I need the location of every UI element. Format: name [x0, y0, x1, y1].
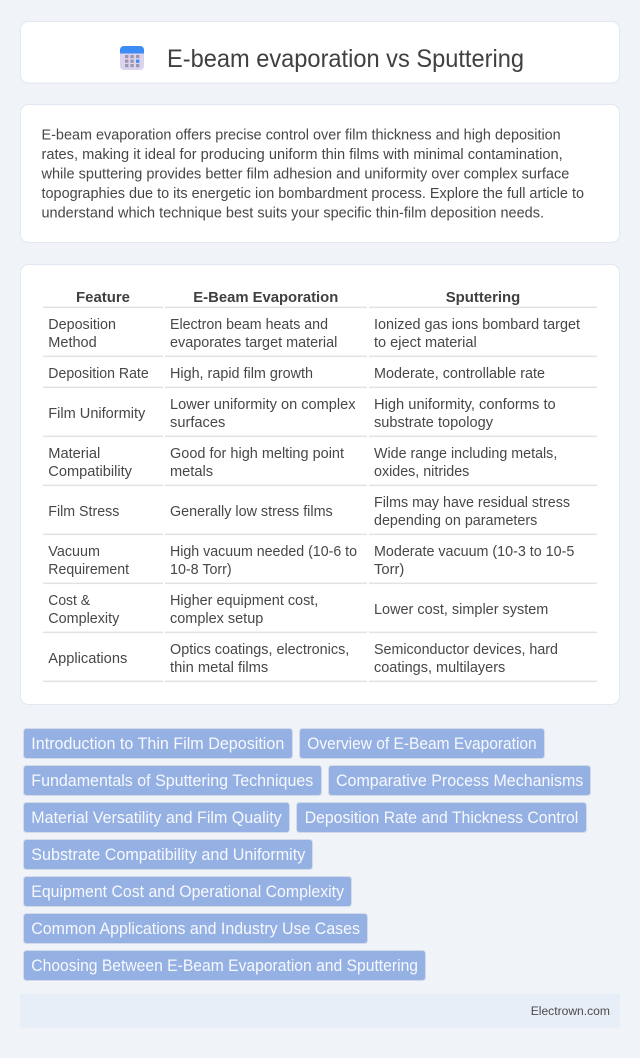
row: vacuum requirement — [48, 544, 574, 578]
tag: material versatility: Material Versatility and Film Quality — [31, 809, 283, 827]
row: material compatibility: Good for high melting point — [170, 446, 344, 462]
row: film uniformity: surfaces — [170, 415, 225, 431]
row: deposition method: to eject material — [374, 335, 477, 351]
row: film uniformity: Film Uniformity — [48, 406, 146, 422]
row: applications — [48, 642, 558, 676]
intro text block: while sputtering provides better film adhesion and uniformity over complex surface — [41, 165, 569, 182]
row: vacuum requirement: High vacuum needed (10-6 to — [170, 544, 357, 560]
row: material compatibility — [48, 446, 557, 480]
row: deposition rate: High, rapid film growth — [170, 366, 313, 382]
tag: substrate — [24, 840, 312, 870]
row: material compatibility: oxides, nitrides — [374, 464, 469, 480]
row: cost and complexity: Cost & — [48, 593, 90, 609]
row: film uniformity: substrate topology — [374, 415, 494, 431]
row: deposition method — [48, 317, 580, 351]
tag: introduction: Introduction to Thin Film Deposition — [31, 735, 284, 753]
row: applications: Applications — [48, 651, 127, 667]
row: deposition rate: Deposition Rate — [48, 366, 149, 382]
row: vacuum requirement: Requirement — [48, 562, 129, 578]
row: deposition rate: Moderate, controllable rate — [374, 366, 545, 382]
table header row — [76, 289, 520, 306]
row: deposition method: evaporates target material — [170, 335, 337, 351]
intro text block — [41, 126, 584, 221]
row: film stress: Generally low stress films — [170, 504, 333, 520]
row: deposition method: Electron beam heats and — [170, 317, 328, 333]
tag: mechanisms: Comparative Process Mechanisms — [336, 772, 583, 790]
row: cost and complexity — [48, 593, 548, 627]
footer: Electrown.com — [531, 1004, 610, 1018]
row: deposition method: Ionized gas ions bombard target — [374, 317, 580, 333]
row: cost and complexity: Lower cost, simpler system — [374, 602, 548, 618]
row: applications: thin metal films — [170, 660, 268, 676]
panel: introduction — [20, 104, 620, 242]
tag: choosing — [24, 950, 426, 980]
row: film stress: depending on parameters — [374, 513, 537, 529]
row: applications: Optics coatings, electronics, — [170, 642, 349, 658]
intro text block: E-beam evaporation offers precise control over film thickness and high deposition — [42, 126, 561, 143]
row: applications: Semiconductor devices, hard — [374, 642, 558, 658]
topic tags — [24, 728, 590, 980]
tag: deposition rate: Deposition Rate and Thickness Control — [305, 809, 578, 827]
table header row: E-Beam Evaporation — [193, 289, 338, 306]
row: film uniformity — [48, 397, 556, 431]
row: film stress — [48, 495, 570, 529]
row: deposition rate — [48, 366, 545, 382]
row: deposition method: Deposition — [48, 317, 116, 333]
row: material compatibility: metals — [170, 464, 213, 480]
row: material compatibility: Compatibility — [48, 464, 133, 480]
row: cost and complexity: Complexity — [48, 611, 120, 627]
intro text block: understand which technique best suits your specific thin-film deposition needs. — [42, 204, 544, 221]
row: cost and complexity: complex setup — [170, 611, 263, 627]
icon: calendar — [120, 46, 144, 70]
tag: introduction — [24, 728, 292, 758]
row: film uniformity: Lower uniformity on complex — [170, 397, 356, 413]
intro text block: rates, making it ideal for producing uniform thin films with minimal contamination, — [42, 146, 563, 163]
row: film stress: Film Stress — [48, 504, 119, 520]
panel: comparison table — [20, 264, 620, 704]
tag: substrate: Substrate Compatibility and Uniformity — [31, 846, 306, 864]
tag: material versatility — [24, 802, 290, 832]
row: vacuum requirement: 10-8 Torr) — [170, 562, 232, 578]
row: material compatibility: Material — [48, 446, 100, 462]
table header row: Feature — [76, 289, 130, 306]
row: cost and complexity: Higher equipment cost, — [170, 593, 318, 609]
tag: applications — [24, 914, 368, 944]
intro text block: topographies due to its energetic ion bombardment process. Explore the full article to — [42, 185, 584, 202]
tag: mechanisms — [328, 766, 590, 796]
tag: deposition rate — [296, 802, 586, 832]
tag: overview: Overview of E-Beam Evaporation — [307, 735, 537, 753]
row: vacuum requirement: Vacuum — [48, 544, 100, 560]
tag: fundamentals: Fundamentals of Sputtering Techniques — [31, 772, 313, 790]
tag: fundamentals — [24, 766, 322, 796]
row: film uniformity: High uniformity, conforms to — [374, 397, 556, 413]
footer — [20, 994, 620, 1028]
table header row: Sputtering — [446, 289, 520, 306]
tag: overview — [300, 728, 544, 758]
tag: applications: Common Applications and Industry Use Cases — [31, 920, 360, 938]
tag: equipment — [24, 876, 352, 906]
row: film stress: Films may have residual stress — [374, 495, 570, 511]
header panel — [20, 22, 620, 83]
row: applications: coatings, multilayers — [374, 660, 505, 676]
row: vacuum requirement: Torr) — [374, 562, 404, 578]
tag: choosing: Choosing Between E-Beam Evaporation and Sputtering — [31, 957, 418, 975]
row: material compatibility: Wide range including metals, — [374, 446, 557, 462]
row: vacuum requirement: Moderate vacuum (10-3 to 10-5 — [374, 544, 574, 560]
row: deposition method: Method — [48, 335, 97, 351]
tag: equipment: Equipment Cost and Operational Complexity — [31, 883, 345, 901]
title: E-beam evaporation vs Sputtering — [167, 46, 524, 73]
